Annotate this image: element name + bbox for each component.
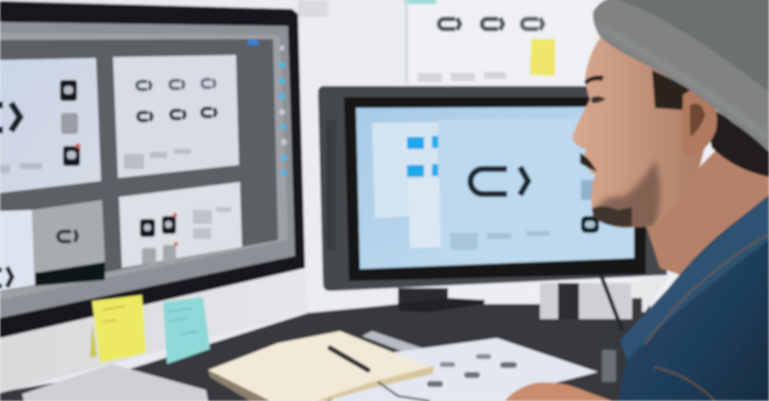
- small app icon: [581, 216, 599, 233]
- wall paper with logo sketches: [298, 0, 600, 84]
- second monitor stand: [397, 288, 485, 312]
- large logo: [470, 167, 528, 195]
- artboard: app icons: [119, 182, 242, 268]
- caption blocks: [450, 233, 478, 250]
- screen frame: [0, 22, 295, 318]
- black bezel: [0, 1, 305, 338]
- printed logo sheet: [330, 338, 598, 401]
- eyebrow: [584, 76, 604, 85]
- screen: [356, 107, 634, 269]
- collar stitching: [645, 234, 769, 401]
- artboard: bottom-left white tile: [0, 210, 35, 291]
- pen holder: [600, 275, 642, 395]
- jacket collar: [620, 196, 769, 360]
- artboard: six logo variations: [113, 55, 239, 178]
- wall sticky note: yellow: [530, 39, 555, 76]
- artboard: grey logo tile: [32, 200, 105, 286]
- bezel side controls: [326, 120, 336, 250]
- silver chin: [0, 268, 308, 393]
- hand: [505, 382, 612, 401]
- ear: [682, 89, 717, 156]
- chin beard: [592, 206, 632, 227]
- hair in front of ear: [652, 70, 690, 110]
- scrap of paper under notebook: [362, 331, 434, 358]
- second monitor: [318, 86, 667, 291]
- beard shadow: [590, 160, 660, 232]
- hair behind ear: [700, 100, 769, 177]
- large monitor: [0, 1, 308, 401]
- side palette dots: [279, 46, 287, 176]
- beanie: [593, 0, 769, 152]
- stand: [22, 364, 208, 401]
- notebook: [208, 331, 434, 401]
- blue swatches: [407, 136, 438, 177]
- pen on notebook: [330, 348, 368, 370]
- eye: [591, 96, 606, 103]
- left document window: [372, 122, 438, 218]
- desk surface: [0, 304, 650, 401]
- artboard: large logo and icons: [0, 58, 101, 193]
- main artboard: [438, 118, 634, 260]
- inner black frame: [344, 97, 646, 281]
- storage boxes behind the desk: [540, 272, 672, 319]
- designer: [572, 0, 769, 401]
- denim jacket: [618, 195, 769, 401]
- toolbar accent: [248, 40, 258, 45]
- second document window: [408, 178, 442, 248]
- yellow sticky note: [90, 295, 146, 363]
- app canvas: [0, 39, 278, 292]
- teal sticky note: [163, 297, 210, 364]
- neck: [645, 150, 769, 275]
- bezel: [318, 86, 667, 291]
- moustache: [580, 153, 597, 172]
- face: [572, 38, 715, 228]
